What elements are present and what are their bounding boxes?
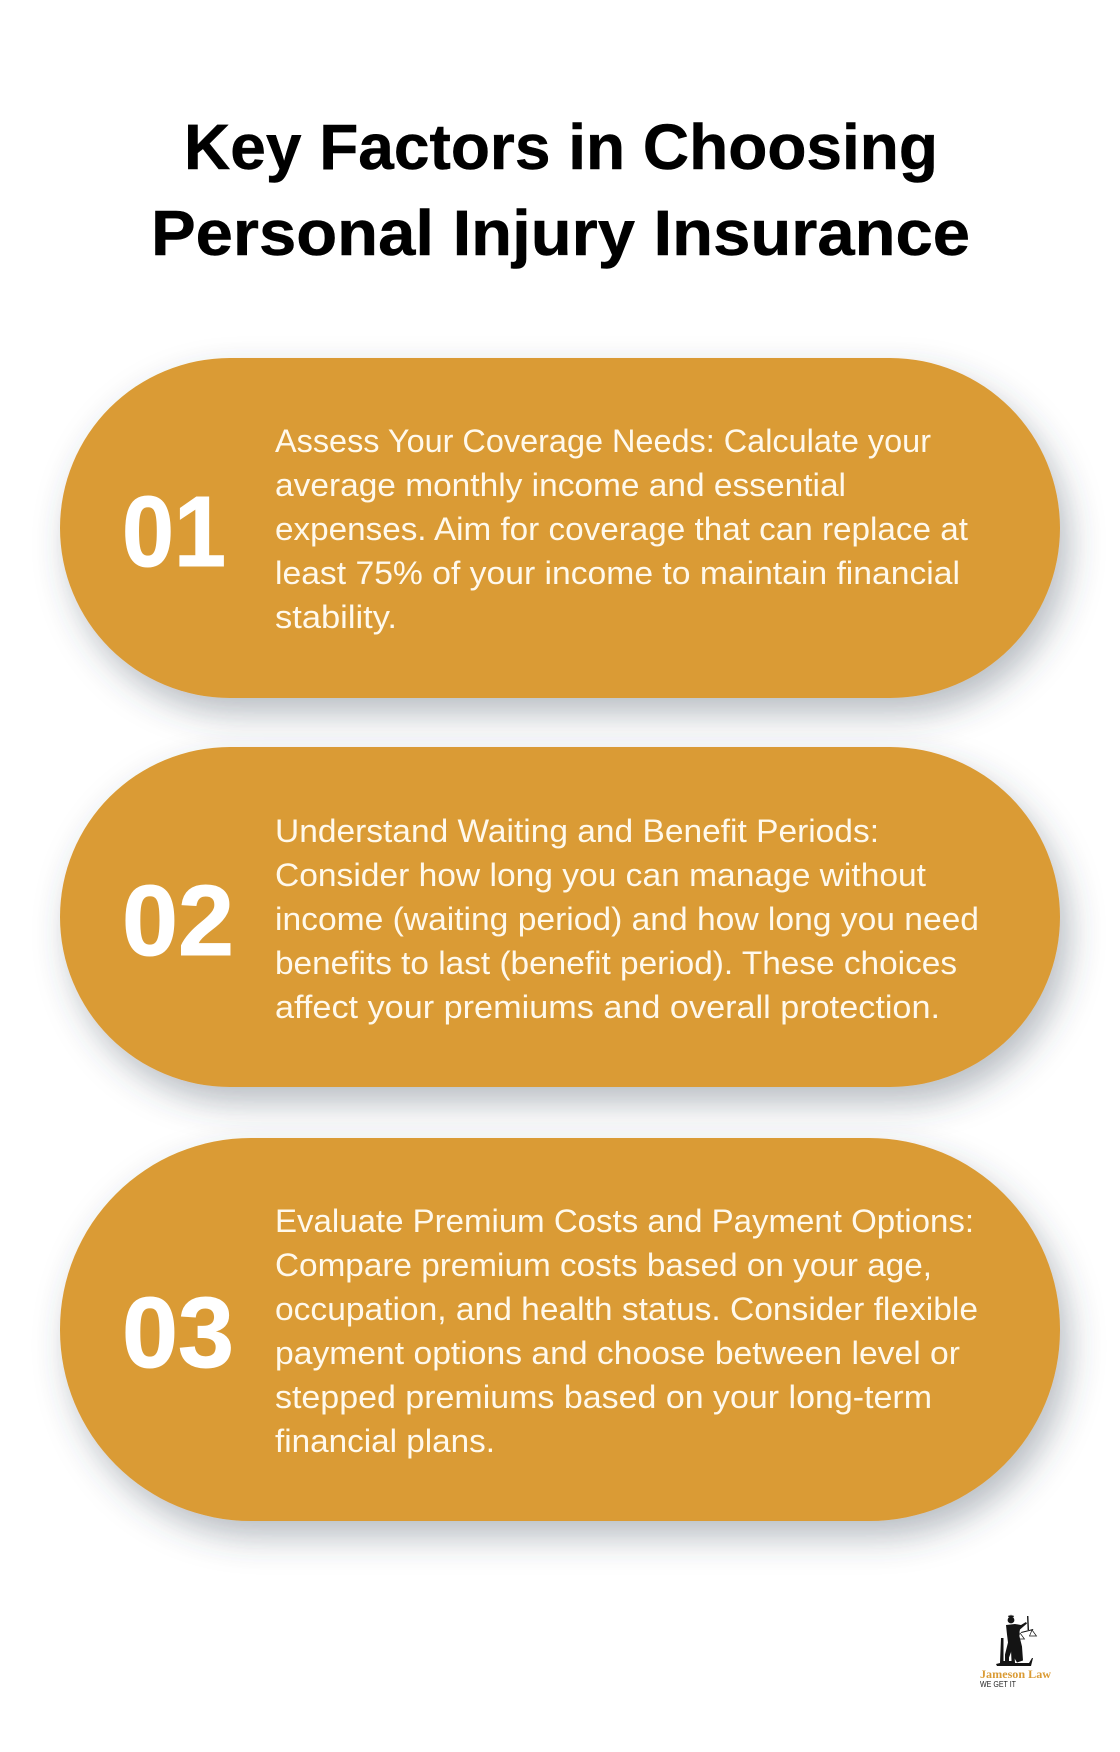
pill background 01 — [60, 358, 1060, 698]
text block 02: benefits to last (benefit period). These choices — [275, 945, 957, 981]
number 03: 03 — [122, 1277, 234, 1389]
text block 03 — [275, 1203, 978, 1459]
text block 02 — [275, 813, 979, 1025]
tagline: WE GET IT — [980, 1680, 1016, 1689]
text block 01: average monthly income and essential — [275, 467, 846, 503]
logo: Jameson Law — [980, 1614, 1051, 1689]
text block 01: least 75% of your income to maintain financial — [275, 555, 960, 591]
text block 01: expenses. Aim for coverage that can replace at — [275, 511, 968, 547]
icon: lady justice with scales — [996, 1614, 1036, 1666]
pill background 02 — [60, 747, 1060, 1087]
pill background 03 — [60, 1138, 1060, 1521]
panel: step 03 premium costs and payment options — [60, 1138, 1060, 1521]
text block 01: Assess Your Coverage Needs: Calculate your — [275, 423, 931, 459]
text block 02: affect your premiums and overall protection. — [275, 989, 940, 1025]
text block 03: stepped premiums based on your long-term — [275, 1379, 932, 1415]
brand name: Jameson Law — [980, 1667, 1051, 1681]
text block 01: stability. — [275, 599, 397, 635]
panel: step 01 assess coverage needs — [60, 358, 1060, 698]
title: Personal Injury Insurance — [151, 197, 970, 269]
text block 02: income (waiting period) and how long you need — [275, 901, 979, 937]
title — [151, 111, 970, 269]
number 02: 02 — [122, 865, 234, 977]
text block 01 — [275, 423, 968, 635]
text block 03: occupation, and health status. Consider flexible — [275, 1291, 978, 1327]
title: Key Factors in Choosing — [184, 111, 938, 183]
text block 03: Evaluate Premium Costs and Payment Options: — [275, 1203, 974, 1239]
panel: step 02 waiting and benefit periods — [60, 747, 1060, 1087]
text block 03: payment options and choose between level or — [275, 1335, 960, 1371]
number 01: 01 — [122, 476, 226, 588]
text block 03: financial plans. — [275, 1423, 495, 1459]
text block 03: Compare premium costs based on your age, — [275, 1247, 932, 1283]
text block 02: Consider how long you can manage without — [275, 857, 926, 893]
text block 02: Understand Waiting and Benefit Periods: — [275, 813, 879, 849]
